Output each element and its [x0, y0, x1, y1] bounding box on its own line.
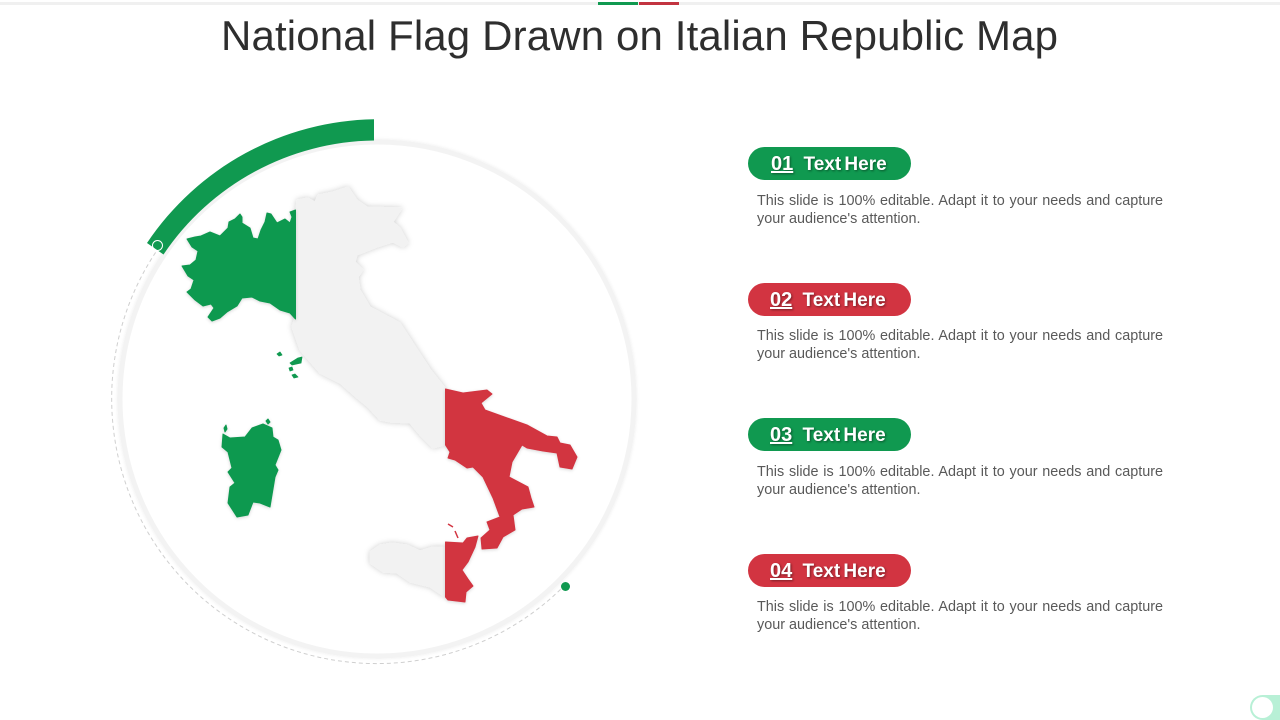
map: red south	[446, 389, 577, 549]
corner toggle badge	[1250, 695, 1280, 720]
pill 03: 03	[770, 424, 792, 446]
pill 02: 02	[770, 289, 792, 311]
item 3	[748, 418, 1163, 498]
map: green north	[182, 210, 296, 321]
top accent bar	[0, 2, 1280, 5]
map of Italy	[182, 187, 577, 602]
map: red islets	[448, 524, 458, 538]
badge knob	[1252, 697, 1273, 718]
description 1: This slide is 100% editable. Adapt it to your needs and capture	[757, 193, 1163, 209]
item 1	[748, 147, 1163, 227]
description 2	[757, 328, 1163, 362]
description 2: your audience's attention.	[757, 346, 921, 362]
pill 01: 01	[771, 153, 793, 175]
arc start marker	[152, 240, 162, 250]
map: Sardinia	[222, 419, 281, 517]
pill 01	[748, 147, 911, 180]
item 2	[748, 283, 1163, 362]
pill 02: Text Here	[802, 290, 886, 311]
map: red Sicily	[446, 536, 478, 602]
description 3: This slide is 100% editable. Adapt it to your needs and capture	[757, 464, 1163, 480]
map: green islands	[277, 352, 302, 378]
pill 01: Text Here	[804, 154, 887, 175]
accent: red segment	[639, 2, 679, 5]
pill 04	[748, 554, 911, 587]
description 1: your audience's attention.	[757, 211, 921, 227]
map: white band Sicily	[370, 543, 445, 597]
arc end dot	[561, 582, 570, 591]
green arc	[147, 119, 374, 254]
accent: green segment	[598, 2, 638, 5]
pill 02	[748, 283, 911, 316]
description 3: your audience's attention.	[757, 482, 921, 498]
description 4: This slide is 100% editable. Adapt it to your needs and capture	[757, 599, 1163, 615]
circle ring	[120, 142, 634, 656]
pill 04: 04	[770, 560, 792, 582]
pill 03	[748, 418, 911, 451]
description 4: your audience's attention.	[757, 617, 921, 633]
description 4	[757, 599, 1163, 633]
pill 03: Text Here	[802, 425, 886, 446]
description 2: This slide is 100% editable. Adapt it to your needs and capture	[757, 328, 1163, 344]
pill 04: Text Here	[802, 561, 886, 582]
dashed outer arc	[112, 247, 564, 664]
item 4	[748, 554, 1163, 633]
description 1	[757, 193, 1163, 227]
map: white central band mainland	[292, 187, 445, 448]
description 3	[757, 464, 1163, 498]
title: National Flag Drawn on Italian Republic Map	[221, 12, 1058, 59]
